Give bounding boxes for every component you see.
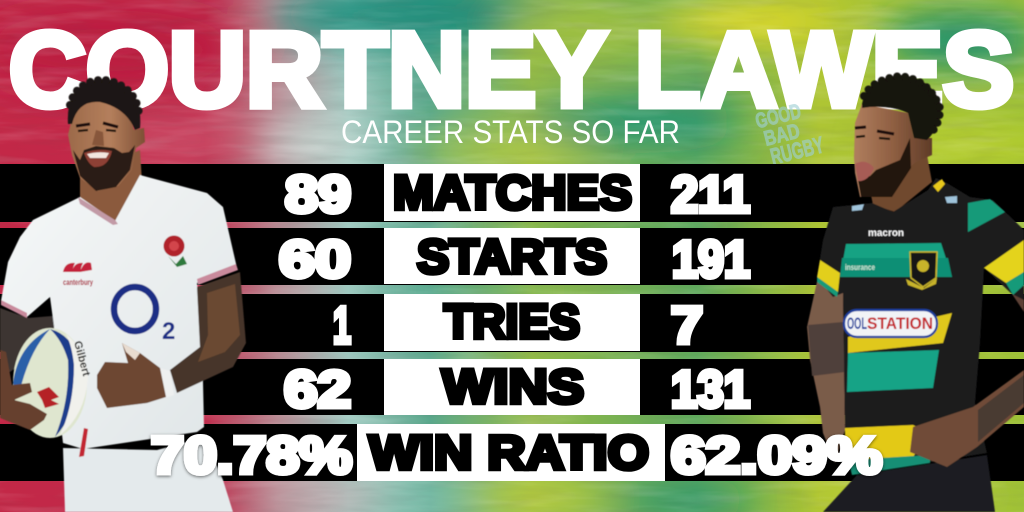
rugby ball: [13, 328, 92, 438]
nose: [92, 130, 104, 146]
beard: [858, 138, 911, 197]
beard: [73, 145, 135, 191]
club crest: [906, 252, 937, 290]
chest green stripes: [840, 243, 952, 277]
win ratio numbers: [151, 427, 882, 485]
lower gold stripe: [848, 313, 952, 353]
watermark: Good Bad Rugby logo: [753, 96, 826, 171]
sponsor: Toolstation: OOL: [847, 314, 867, 333]
player: England, white shirt: [0, 79, 246, 512]
head: [68, 100, 145, 191]
England career numbers: 89: [285, 166, 351, 224]
stat labels: WINS: [442, 361, 584, 414]
right arm at edge: [1012, 294, 1024, 312]
Northampton career numbers: 191: [672, 231, 750, 289]
wristband: [160, 368, 174, 398]
sponsor small: insurance: [845, 263, 875, 272]
sponsor: Toolstation: [844, 310, 937, 337]
bottom gold hem: [845, 425, 930, 460]
neck: [870, 155, 932, 212]
eyes: [76, 123, 118, 127]
rear arm: [0, 308, 56, 372]
near hand: [97, 343, 166, 408]
collar yellow tab: [933, 179, 945, 192]
shirt: [1, 175, 237, 449]
stat labels: WIN RATIO: [369, 427, 649, 480]
win ratio numbers: 70.78%: [151, 427, 352, 485]
watermark: Good Bad Rugby logo: GOOD: [753, 100, 803, 133]
England career numbers: 60: [279, 231, 351, 289]
hair: [68, 79, 140, 130]
right forearm: [910, 370, 1024, 467]
rose badge: [164, 236, 187, 267]
white label panels: [357, 164, 665, 481]
tattooed forearm: [170, 272, 246, 393]
sponsor logos on shoulders: [852, 196, 957, 211]
sleeve stripes: [984, 240, 1024, 283]
shoulder stripe: [968, 199, 1005, 232]
black stat bars: [0, 164, 1024, 481]
England career numbers: 1: [333, 297, 351, 355]
watermark: Good Bad Rugby logo: BAD: [762, 120, 802, 151]
Northampton career numbers: 211: [671, 166, 750, 224]
hair: [862, 75, 941, 140]
O2 sponsor logo: [114, 287, 175, 345]
rugby ball: Gilbert: [71, 340, 92, 378]
head: [854, 104, 932, 197]
shirt: [817, 178, 1024, 475]
mouth: [84, 150, 112, 167]
Northampton career numbers: 131: [671, 361, 750, 419]
sponsor: Toolstation: STATION: [867, 314, 933, 333]
England career numbers: [279, 166, 351, 419]
player: Northampton, black green gold shirt: [807, 75, 1024, 512]
Northampton career numbers: [671, 166, 750, 419]
shorts: [63, 437, 233, 512]
stat labels: MATCHES: [393, 167, 632, 220]
canterbury logo: canterbury: [63, 278, 93, 287]
sleeve trims: [197, 264, 238, 285]
red hem mark: [79, 428, 88, 457]
mouth: [855, 162, 874, 181]
subtitle: CAREER STATS SO FAR: [341, 114, 680, 150]
neck: [80, 150, 142, 222]
Northampton career numbers: 7: [671, 297, 703, 355]
watermark: Good Bad Rugby logo: RUGBY: [768, 131, 826, 170]
title: COURTNEY LAWES: [9, 11, 1014, 129]
stat labels: STARTS: [417, 231, 607, 284]
stat labels: TRIES: [444, 296, 580, 349]
canterbury logo: [63, 262, 93, 287]
win ratio numbers: 62.09%: [671, 427, 882, 485]
stat labels: [369, 167, 649, 480]
shorts: [823, 455, 995, 512]
eye: [855, 127, 894, 134]
left arm: [807, 277, 845, 463]
collar trim: [78, 197, 118, 225]
macron logo: macron: [868, 228, 904, 239]
lower green stripes: [847, 350, 939, 392]
O2 sponsor logo: 2: [162, 318, 175, 345]
hand on ball: [0, 350, 47, 430]
England career numbers: 62: [284, 361, 351, 419]
